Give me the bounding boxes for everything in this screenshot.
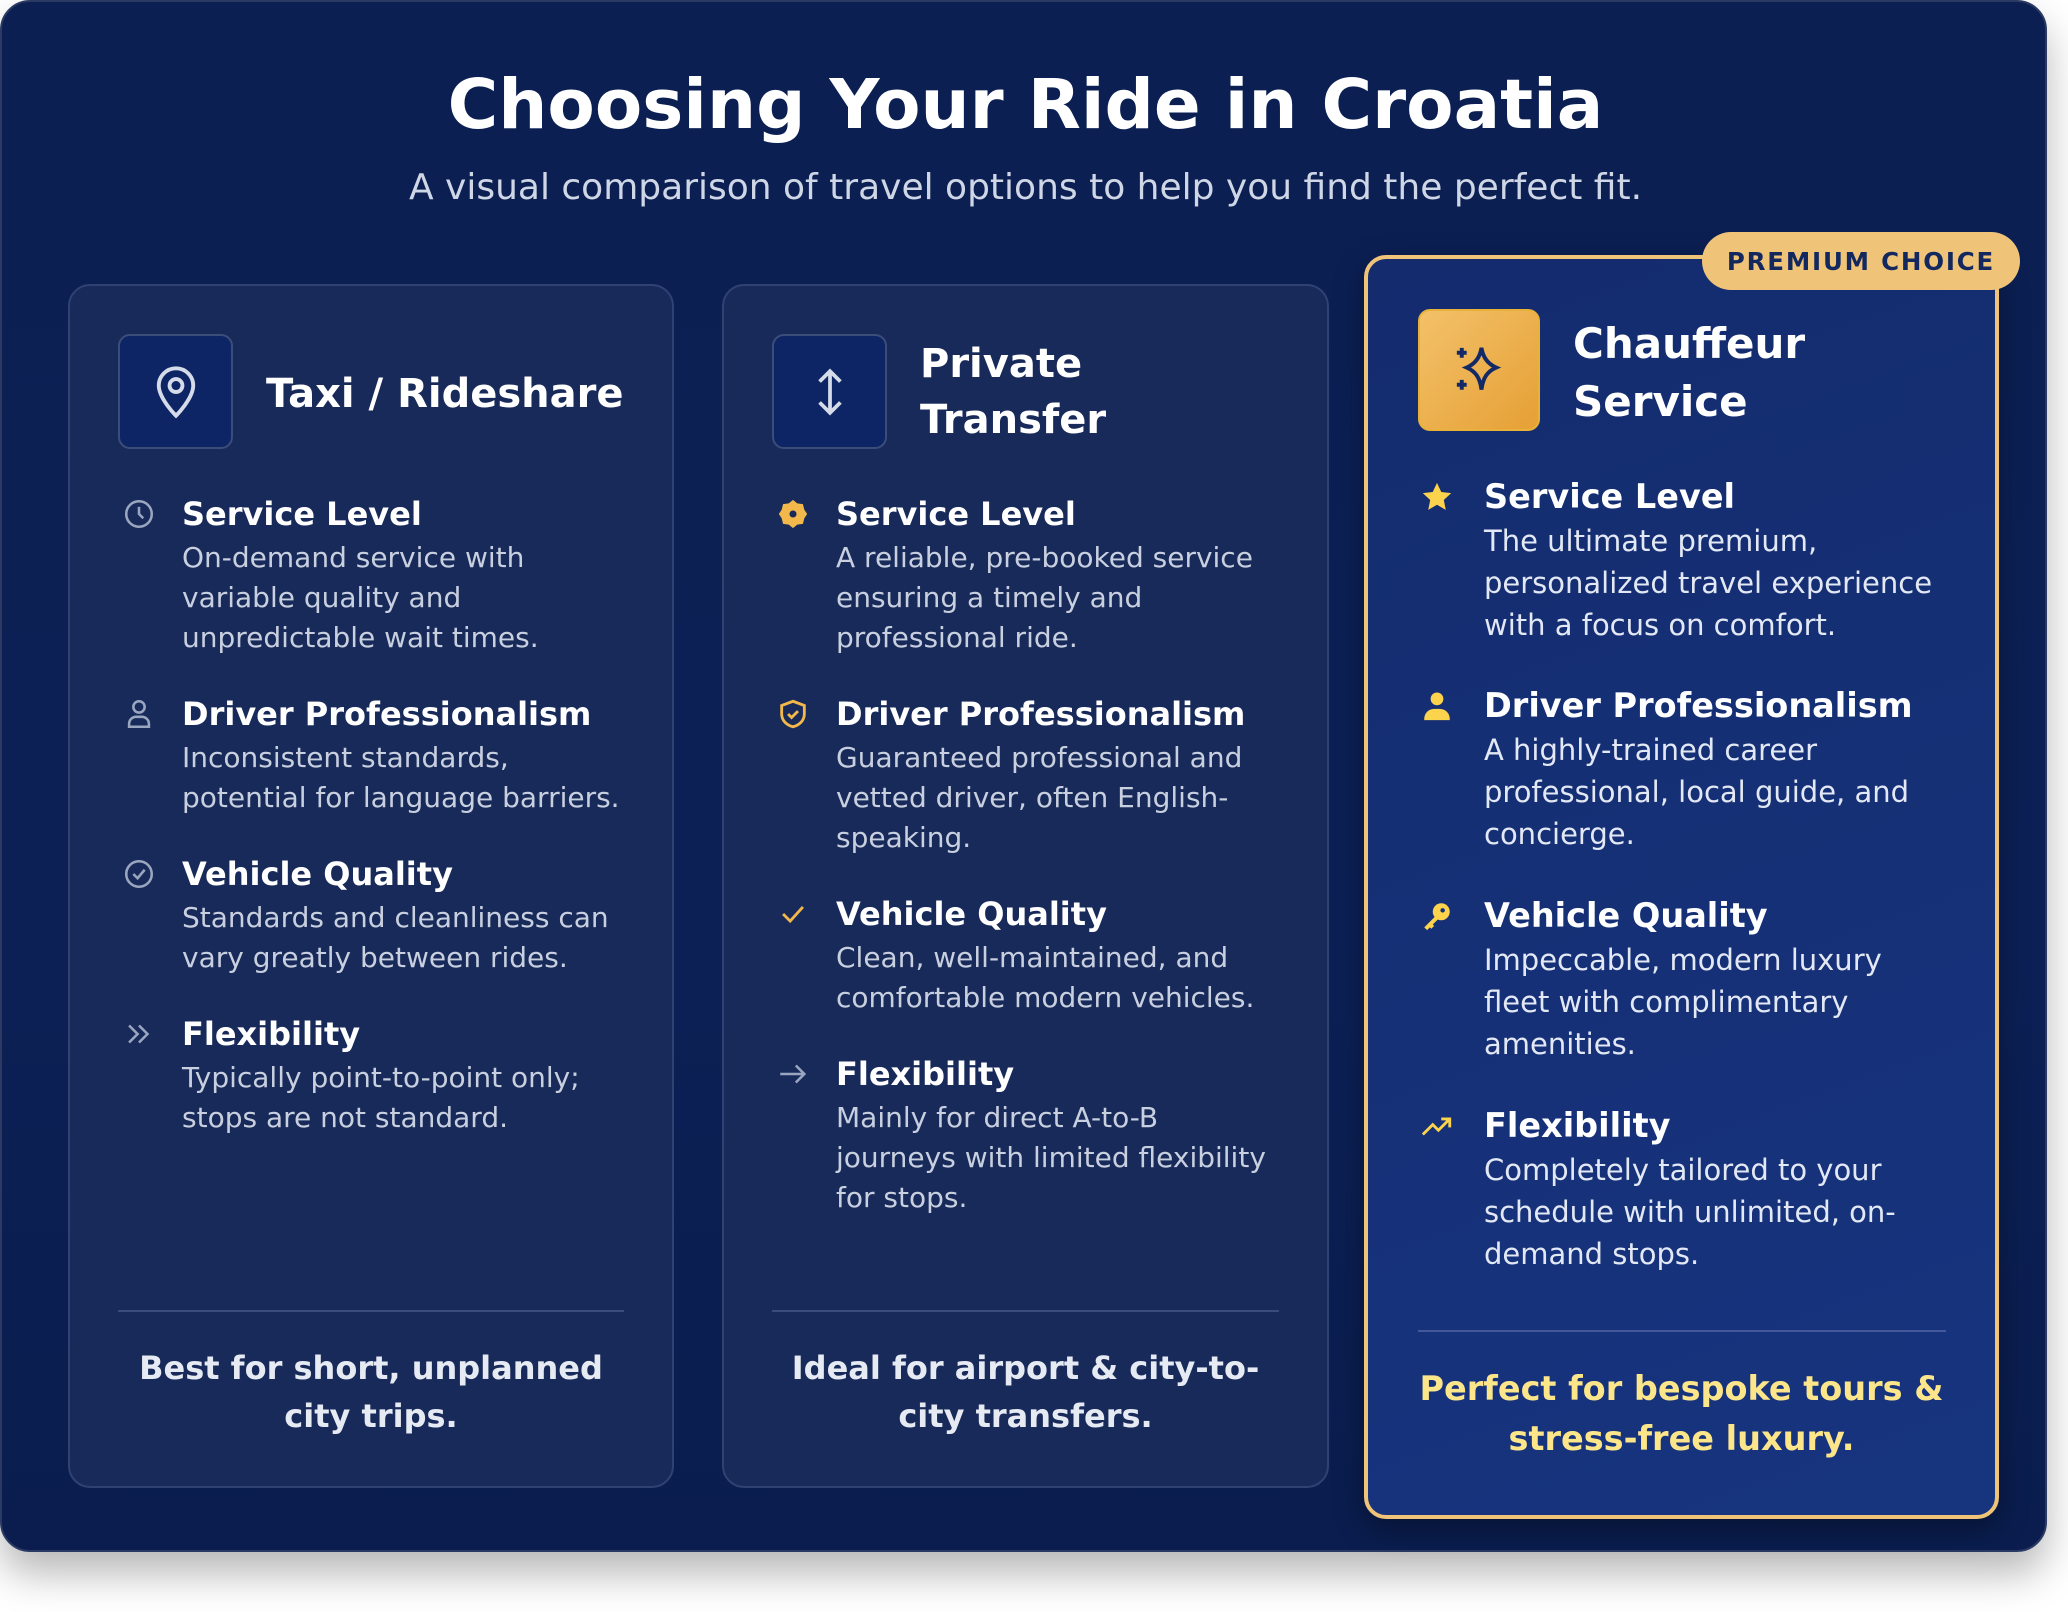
- card title: Transfer: [920, 397, 1106, 443]
- icon: sparkles: [1418, 309, 1540, 431]
- feature: driver: A highly-trained career professional, local guide, and concierge.: [1484, 733, 1909, 851]
- feature: flexibility: [780, 1055, 1266, 1214]
- feature: service level: Service Level: [182, 495, 422, 533]
- feature: service level: On-demand service with variable quality and unpredictable wait times.: [182, 541, 539, 654]
- card title: Service: [1573, 377, 1748, 426]
- feature: flexibility: [1422, 1106, 1896, 1271]
- card title: Taxi / Rideshare: [266, 371, 624, 417]
- feature: vehicle: Impeccable, modern luxury fleet with complimentary amenities.: [1484, 943, 1882, 1061]
- footer text: [1419, 1369, 1944, 1458]
- feature: service level: [1422, 477, 1932, 642]
- icon: up-down arrow: [772, 334, 887, 449]
- feature: vehicle: Vehicle Quality: [182, 855, 453, 893]
- footer text: Best for short, unplanned: [139, 1349, 603, 1387]
- feature: driver: Driver Professionalism: [182, 695, 591, 733]
- feature: vehicle: [1424, 896, 1882, 1061]
- feature: flexibility: Flexibility: [1484, 1106, 1670, 1145]
- feature: flexibility: Flexibility: [182, 1015, 360, 1053]
- feature: service level: The ultimate premium, personalized travel experience with a focus on comfort.: [1484, 524, 1932, 642]
- card title: [920, 341, 1106, 443]
- feature: service level: A reliable, pre-booked service ensuring a timely and professional ride.: [836, 541, 1253, 654]
- feature: flexibility: Mainly for direct A-to-B journeys with limited flexibility for stops.: [836, 1101, 1266, 1214]
- card title: Private: [920, 341, 1082, 387]
- subtitle: A visual comparison of travel options to help you find the perfect fit.: [409, 167, 1642, 208]
- panel: taxi: [68, 284, 674, 1488]
- footer text: [139, 1349, 603, 1435]
- feature: service level: Service Level: [1484, 477, 1735, 516]
- footer text: Ideal for airport & city-to-: [792, 1349, 1259, 1387]
- feature: flexibility: Typically point-to-point only; stops are not standard.: [182, 1061, 580, 1134]
- panel: private transfer: [722, 284, 1329, 1488]
- feature: driver: [1424, 686, 1913, 851]
- feature: service level: [778, 495, 1253, 654]
- feature: flexibility: Flexibility: [836, 1055, 1014, 1093]
- feature: driver: Inconsistent standards, potential for language barriers.: [182, 741, 620, 814]
- feature: vehicle: Vehicle Quality: [1484, 896, 1768, 935]
- feature: vehicle: [125, 855, 609, 974]
- feature: flexibility: Completely tailored to your schedule with unlimited, on-demand stops.: [1484, 1153, 1896, 1271]
- feature: vehicle: Clean, well-maintained, and comfortable modern vehicles.: [836, 941, 1254, 1014]
- feature: vehicle: Vehicle Quality: [836, 895, 1107, 933]
- card title: [1573, 319, 1805, 426]
- footer text: city trips.: [284, 1397, 458, 1435]
- feature: flexibility: [128, 1015, 580, 1134]
- feature: vehicle: Standards and cleanliness can vary greatly between rides.: [182, 901, 609, 974]
- feature: driver: Guaranteed professional and vetted driver, often English-speaking.: [836, 741, 1242, 854]
- feature: driver: Driver Professionalism: [836, 695, 1245, 733]
- feature: driver: [128, 695, 620, 814]
- card title: Chauffeur: [1573, 319, 1805, 368]
- feature: driver: Driver Professionalism: [1484, 686, 1913, 725]
- icon: location pin: [118, 334, 233, 449]
- footer text: city transfers.: [898, 1397, 1153, 1435]
- feature: driver: [780, 695, 1245, 854]
- feature: vehicle: [782, 895, 1254, 1014]
- footer text: [792, 1349, 1259, 1435]
- footer text: Perfect for bespoke tours &: [1419, 1369, 1944, 1408]
- feature: service level: [125, 495, 539, 654]
- badge: premium choice: PREMIUM CHOICE: [1727, 246, 1995, 276]
- badge: premium choice: [1702, 232, 2020, 290]
- title: Choosing Your Ride in Croatia: [448, 65, 1603, 145]
- feature: service level: Service Level: [836, 495, 1076, 533]
- panel: chauffeur: [1364, 255, 1999, 1519]
- footer text: stress-free luxury.: [1508, 1419, 1854, 1458]
